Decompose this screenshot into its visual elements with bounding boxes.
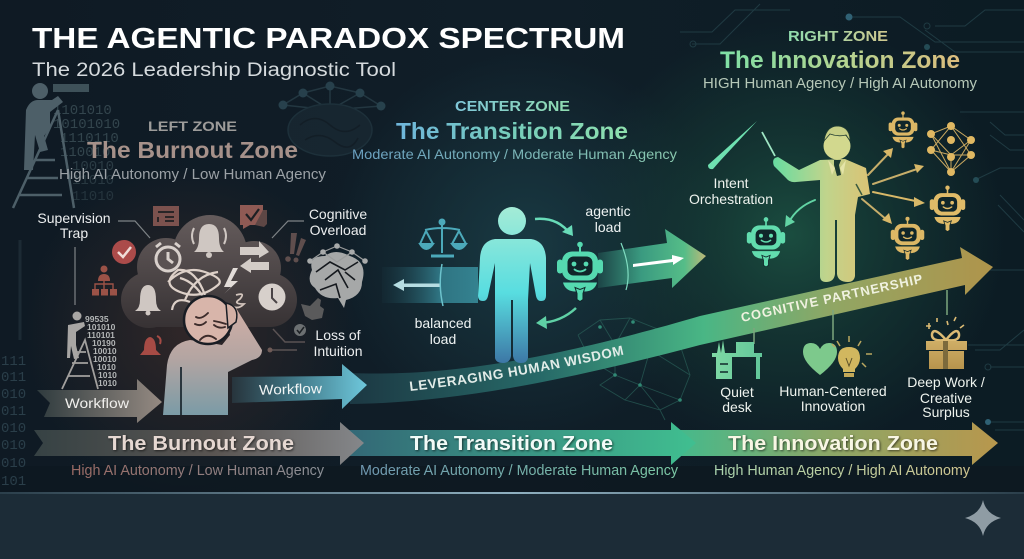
icon: neural network (927, 122, 975, 176)
agentic load arrow (598, 229, 706, 290)
icon: org chart (92, 266, 117, 296)
subtitle: The 2026 Leadership Diagnostic Tool (32, 60, 396, 81)
label: quiet desk: Quiet (720, 384, 754, 400)
icon: bell top (192, 224, 226, 258)
bottom chevron arrows (34, 422, 998, 465)
label: human-centered innovation: Innovation (801, 398, 865, 414)
bottom sublabels: High Human Agency / High AI Autonomy (714, 463, 971, 479)
left binary column: 010 (1, 438, 26, 454)
label: loss of intuition (313, 327, 363, 359)
icon: conductor baton (708, 121, 757, 169)
label: loss of intuition: Loss of (315, 327, 361, 343)
label: loss of intuition: Intuition (313, 343, 363, 359)
icon: exclamation marks (285, 233, 306, 262)
icon: gift box (926, 317, 967, 369)
heading: right zone (703, 28, 978, 92)
label: human-centered innovation: Human-Centered (779, 383, 887, 399)
left binary column: 101 (1, 474, 26, 490)
icon: bell left (135, 285, 161, 316)
background figure on ladder with binary: 10010 (72, 159, 114, 175)
small figure on ladder (62, 312, 117, 389)
label: innovation: The Innovation Zone (728, 433, 938, 455)
label: cognitive partnership: COGNITIVE PARTNERSHIP (739, 271, 925, 325)
workflow arrow out (232, 364, 367, 409)
icon: alarm clock (156, 243, 180, 271)
heading: right zone: RIGHT ZONE (788, 28, 888, 45)
small figure on ladder: 10010 (93, 354, 117, 364)
circuit lines decoration (20, 4, 1024, 430)
heading: center zone: CENTER ZONE (455, 99, 570, 115)
small figure on ladder: 1010 (98, 370, 117, 380)
icon: red bell (140, 336, 161, 355)
left binary column: 010 (1, 387, 26, 403)
icon: thumbs down fading (301, 298, 324, 320)
small figure on ladder: 99535 (85, 314, 109, 324)
heading: center zone (352, 99, 677, 162)
label: intent orchestration (689, 175, 773, 207)
balanced load band arrow (382, 264, 478, 306)
small figure on ladder: 10010 (93, 346, 117, 356)
icon: opposing arrows (240, 241, 269, 273)
label: leveraging human wisdom: LEVERAGING HUMAN WISDOM (410, 346, 624, 391)
icon: form card (153, 206, 179, 226)
label: intent orchestration: Intent (713, 175, 749, 191)
label: supervision trap: Trap (60, 225, 88, 241)
background figure on ladder with binary: 110010 (60, 145, 110, 161)
label: agentic load: agentic (585, 203, 631, 219)
small figure on ladder: 1010 (98, 378, 117, 388)
label: deep work creative surplus: Surplus (922, 404, 970, 420)
footer band (0, 492, 1024, 559)
label: cognitive overload: Overload (310, 222, 366, 238)
heading: left zone: The Burnout Zone (87, 137, 298, 163)
label: agentic load: load (595, 219, 621, 235)
connector lines (754, 290, 947, 344)
heading: right zone: The Innovation Zone (720, 47, 960, 74)
label: cognitive overload (309, 206, 367, 238)
label: cognitive overload: Cognitive (309, 206, 367, 222)
label: burnout: The Burnout Zone (108, 433, 294, 455)
label: balanced load: load (430, 331, 456, 347)
workflow arrow out: Workflow (259, 380, 323, 398)
left binary column: 010 (1, 456, 26, 472)
label: quiet desk (720, 384, 754, 415)
small figure on ladder: 110101 (87, 330, 115, 340)
label: balanced load (415, 315, 471, 347)
workflow arrow in (37, 379, 162, 423)
icon: light bulb (832, 336, 872, 377)
robot: gold lower (891, 217, 924, 260)
workflow arrow in: Workflow (65, 395, 130, 411)
background figure on ladder with binary: 1101010 (53, 103, 112, 119)
center figure (478, 207, 546, 363)
icon: chat check (240, 205, 267, 229)
robot: center (557, 242, 603, 302)
label: intent orchestration: Orchestration (689, 191, 773, 207)
left binary column: 011 (1, 404, 26, 420)
label: human-centered innovation (779, 383, 887, 414)
background figure on ladder with binary: 11010 (72, 189, 114, 205)
icon: heart (803, 343, 837, 375)
label: agentic load (585, 203, 631, 235)
small figure on ladder: 1010 (97, 362, 116, 372)
icon: sparkle (965, 500, 1001, 536)
heading: center zone: The Transition Zone (396, 118, 628, 144)
icon: quiet desk (712, 340, 762, 379)
background figure on ladder with binary: 1110110 (60, 131, 119, 147)
icon: brain network (307, 243, 368, 308)
heading: left zone: LEFT ZONE (148, 118, 237, 134)
innovation scene (689, 111, 985, 420)
curved arrow to robot (535, 219, 573, 236)
arrows from leader to agents (785, 148, 925, 227)
burned out person (163, 296, 262, 415)
background figure on ladder with binary (13, 83, 120, 208)
left binary column: 010 (1, 421, 26, 437)
burnout scene (37, 205, 368, 423)
leader lines (75, 221, 304, 305)
icon: lightning bolt (224, 268, 238, 294)
background figure on ladder with binary: 10101010 (53, 117, 120, 133)
label: transition: The Transition Zone (410, 433, 613, 455)
left binary column (1, 354, 26, 490)
icon: stress cloud (121, 215, 297, 328)
robot: green (747, 217, 785, 267)
transition scene (382, 203, 706, 363)
small figure on ladder: 10190 (92, 338, 116, 348)
faint brain network top (278, 82, 386, 156)
label: quiet desk: desk (722, 399, 753, 415)
wireframe brain (578, 318, 690, 420)
bottom sublabels: Moderate AI Autonomy / Moderate Human Agency (360, 463, 679, 479)
leader figure (762, 126, 870, 282)
heading: left zone (59, 118, 327, 183)
title: THE AGENTIC PARADOX SPECTRUM (32, 23, 625, 55)
left binary column: 111 (1, 354, 26, 370)
heading: right zone: HIGH Human Agency / High AI Autonomy (703, 76, 978, 92)
bottom sublabels: High AI Autonomy / Low Human Agency (71, 463, 325, 479)
background figure on ladder with binary: 11010 (72, 173, 114, 189)
ribbon arrow: leveraging human wisdom to cognitive partnership (350, 247, 993, 404)
icon: small check and connectors (268, 324, 306, 352)
icon: balance scale (420, 220, 466, 256)
label: balanced load: balanced (415, 315, 471, 331)
curved arrow from robot (536, 308, 576, 329)
label: supervision trap (37, 210, 111, 241)
bottom sublabels (71, 463, 971, 479)
label: deep work creative surplus (907, 374, 985, 420)
label: deep work creative surplus: Creative (920, 390, 972, 406)
robot: gold top (889, 111, 917, 149)
small figure on ladder: 101010 (87, 322, 116, 332)
label: supervision trap: Supervision (37, 210, 111, 226)
left binary column: 011 (1, 370, 26, 386)
icon: clock (258, 284, 286, 310)
label: deep work creative surplus: Deep Work / (907, 374, 985, 390)
robot: gold right (930, 186, 965, 232)
heading: left zone: High AI Autonomy / Low Human Agency (59, 167, 327, 183)
heading: center zone: Moderate AI Autonomy / Moderate Human Agency (352, 146, 677, 162)
icon: red check circle (112, 240, 136, 264)
icon: scribble of tangled thoughts (168, 270, 220, 310)
